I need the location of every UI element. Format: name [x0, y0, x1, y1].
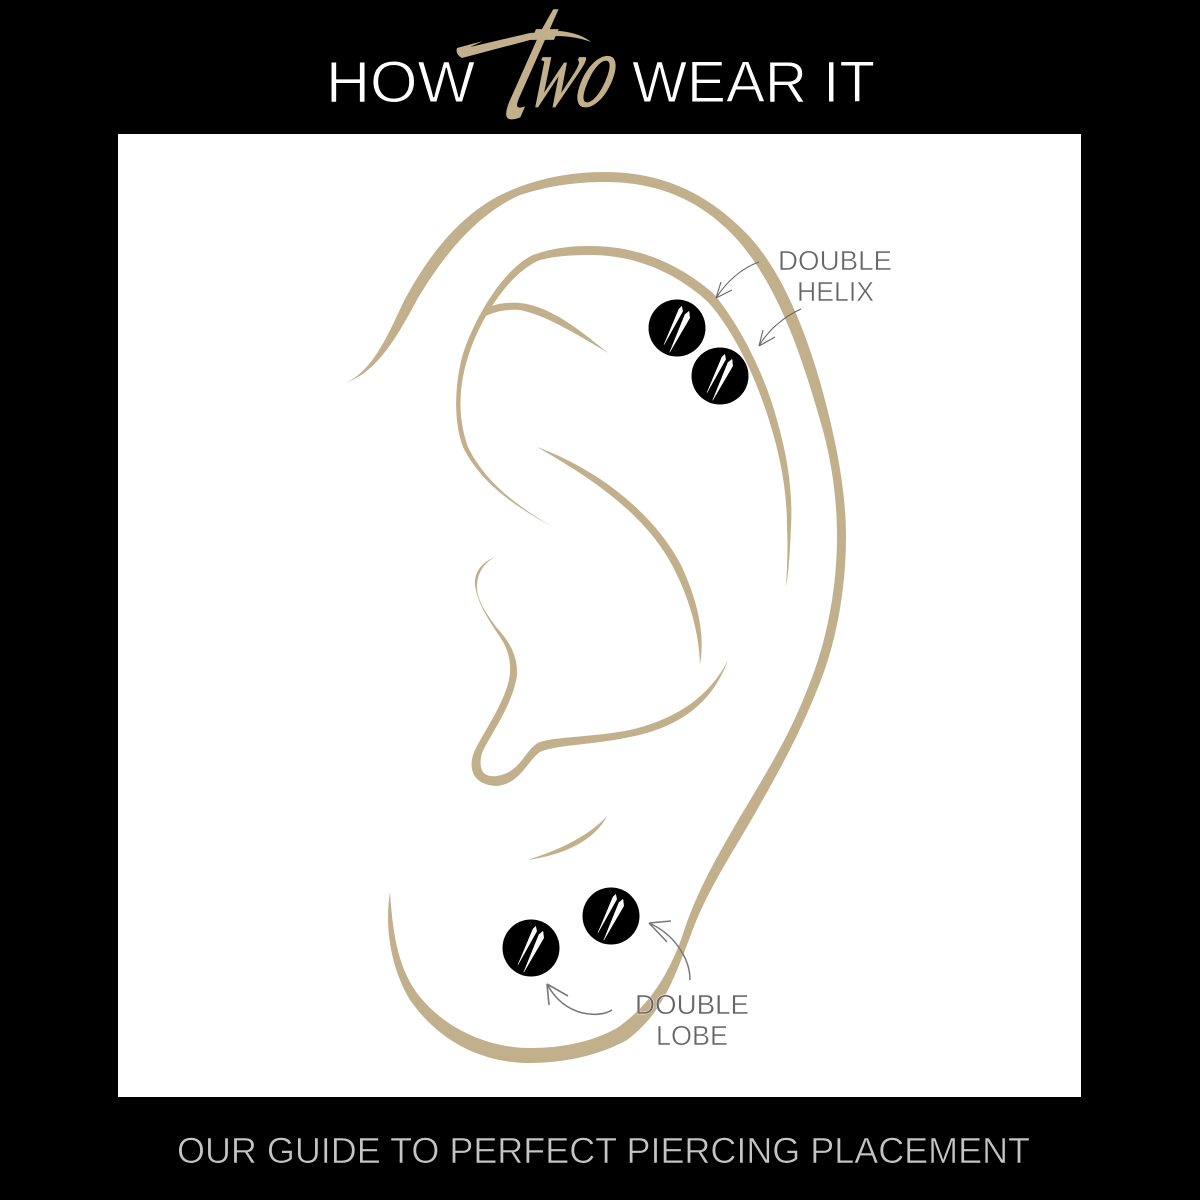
lobe crease [527, 816, 607, 860]
ear illustration [345, 172, 846, 1063]
label: double helix: HELIX [797, 276, 874, 307]
label: double helix [778, 245, 892, 307]
white panel [118, 134, 1081, 1097]
arrow: double helix lower [759, 309, 801, 346]
arrow: double helix upper [716, 262, 759, 298]
title: HOW [326, 50, 475, 115]
label: double lobe [635, 989, 749, 1051]
arrow: double lobe lower [547, 984, 612, 1014]
script word: two: wo [517, 14, 636, 130]
tragus and concha [472, 557, 728, 786]
title: WEAR IT [632, 50, 875, 115]
script word: two [457, 0, 636, 154]
piercing stud: helix lower [692, 348, 748, 404]
upper fold [482, 303, 608, 353]
title [326, 0, 875, 154]
piercing stud: lobe upper [582, 888, 640, 944]
inner helix [456, 246, 791, 587]
antihelix [537, 447, 702, 665]
subtitle: OUR GUIDE TO PERFECT PIERCING PLACEMENT [177, 1130, 1030, 1171]
piercing stud: helix upper [648, 300, 706, 356]
label: double lobe: LOBE [656, 1020, 728, 1051]
ear outer outline [345, 172, 846, 1063]
label: double lobe: DOUBLE [635, 989, 749, 1020]
label: double helix: DOUBLE [778, 245, 892, 276]
arrow: double lobe upper [649, 921, 690, 980]
piercing stud: lobe lower [502, 920, 560, 976]
